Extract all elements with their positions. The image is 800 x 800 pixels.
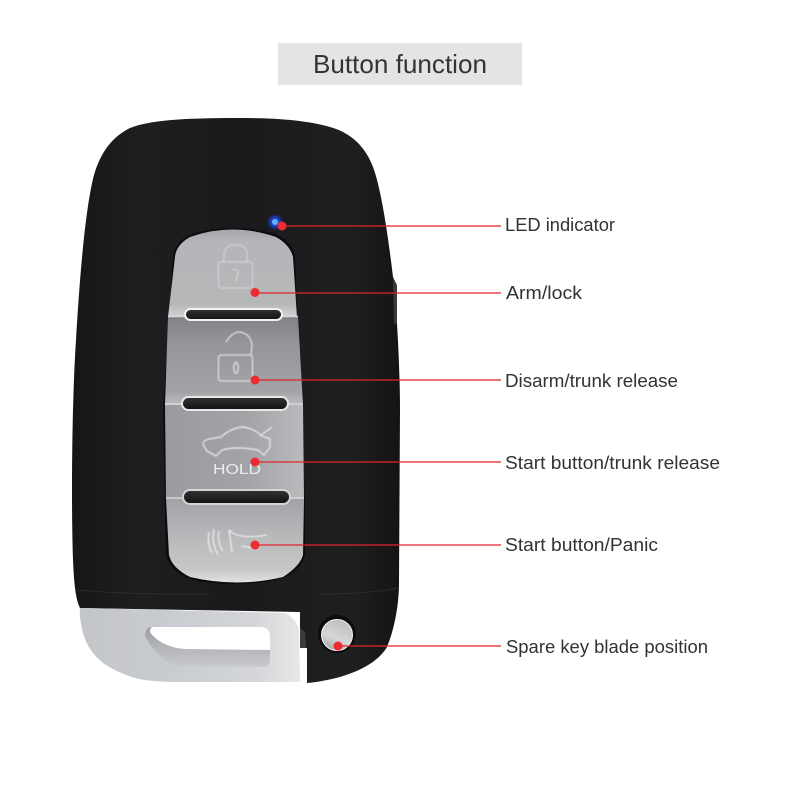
slot 2 <box>182 397 288 410</box>
slot 3 <box>183 490 290 504</box>
icon: horn <box>208 529 267 555</box>
icon: lock <box>218 245 252 288</box>
callout: Disarm/trunk release: Disarm/trunk release <box>505 371 678 391</box>
side notch <box>393 277 397 325</box>
callout: Arm/lock <box>250 283 583 303</box>
callout: Arm/lock: Arm/lock <box>506 283 583 303</box>
lower seam <box>78 588 397 594</box>
spare key release button <box>318 615 356 653</box>
callout: Start button/Panic: Start button/Panic <box>505 535 658 555</box>
title: Button function <box>313 49 487 79</box>
start/trunk button <box>165 405 304 499</box>
fob body <box>72 118 400 683</box>
key fob <box>72 118 400 683</box>
callout: LED indicator <box>278 215 615 235</box>
LED indicator light <box>267 214 283 230</box>
start/panic button <box>166 499 304 582</box>
title <box>278 43 522 85</box>
callout: Start button/Panic <box>250 535 658 555</box>
slot 1 <box>185 309 282 320</box>
button surround <box>163 228 305 584</box>
callout: Disarm/trunk release <box>250 371 678 391</box>
icon: open lock <box>218 332 252 381</box>
icon: car with HOLD text <box>203 427 272 456</box>
start/trunk button: HOLD <box>213 461 261 478</box>
arm/lock button <box>168 230 297 317</box>
callout: Spare key blade position <box>334 637 708 657</box>
callout: LED indicator: LED indicator <box>505 215 615 235</box>
chrome key blade <box>80 608 300 682</box>
junction highlights <box>165 316 304 498</box>
callout: Start button/trunk release: Start button/trunk release <box>505 453 720 473</box>
blade hole <box>145 627 270 667</box>
callout: Spare key blade position: Spare key blade position <box>506 637 708 657</box>
notch between blade and body <box>300 648 307 683</box>
disarm button <box>165 317 303 405</box>
callout: Start button/trunk release <box>250 453 720 473</box>
